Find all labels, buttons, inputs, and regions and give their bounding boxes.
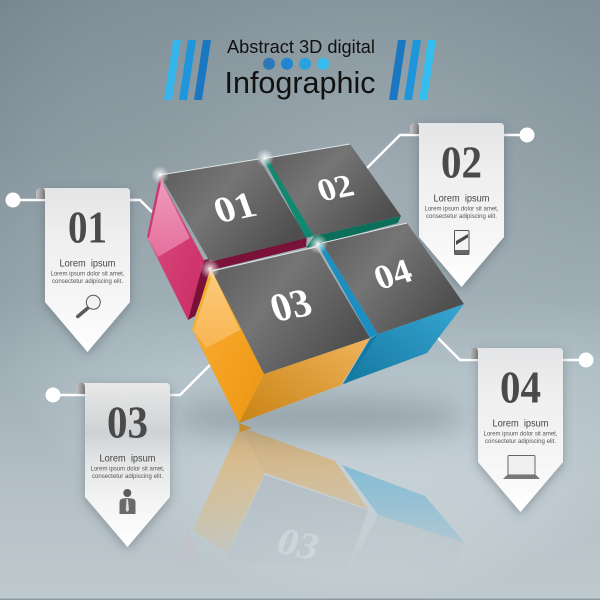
panel: 03 ribbon <box>76 383 170 547</box>
label 04: 04 <box>368 251 417 297</box>
heading 03: Lorem ipsum <box>100 452 156 464</box>
block 03 orange <box>192 247 370 432</box>
body text 02: Lorem ipsum dolor sit amet, <box>424 206 499 212</box>
face 03 <box>212 247 370 374</box>
body text 03: Lorem ipsum dolor sit amet, <box>90 466 165 472</box>
title line 1: Abstract 3D digital <box>227 37 375 57</box>
heading 02: Lorem ipsum <box>434 192 490 204</box>
connector lines <box>6 128 594 402</box>
number 01: 01 <box>68 202 107 252</box>
cube shadow on floor <box>170 398 470 438</box>
face 02 <box>267 144 401 236</box>
body text 02 <box>424 206 499 220</box>
icon: magnifier <box>78 295 100 316</box>
heading 01: Lorem ipsum <box>60 258 116 270</box>
number 02: 02 <box>441 138 482 188</box>
icon: laptop <box>503 456 540 479</box>
block 01 pink <box>147 159 307 320</box>
body text 04: Lorem ipsum dolor sit amet, <box>484 430 558 438</box>
face 04 <box>322 223 464 334</box>
body text 01: consectetur adipiscing elit. <box>52 278 123 285</box>
cube chart <box>147 144 464 432</box>
sparkles <box>151 149 328 279</box>
label 03: 03 <box>265 281 318 331</box>
number 04: 04 <box>500 362 541 412</box>
left stripes <box>164 40 211 100</box>
label 02: 02 <box>312 168 359 209</box>
connector 03 <box>53 365 210 395</box>
face 01 <box>160 159 307 262</box>
body text 03: consectetur adipiscing elit. <box>92 473 163 480</box>
body text 03 <box>90 466 165 480</box>
panel: 01 ribbon <box>36 188 130 352</box>
body text 02: consectetur adipiscing elit. <box>426 213 497 220</box>
reflected number: 03 <box>271 521 325 568</box>
reflection of cube <box>193 427 464 553</box>
panel: 02 ribbon <box>410 123 504 287</box>
title dots <box>263 58 329 70</box>
heading 04: Lorem ipsum <box>492 418 549 430</box>
icon: phone <box>454 230 469 254</box>
number 03: 03 <box>107 398 148 448</box>
right stripes <box>389 40 436 100</box>
title line 2: Infographic <box>224 65 376 100</box>
block 04 blue <box>318 223 464 384</box>
body text 01: Lorem ipsum dolor sit amet, <box>50 270 125 278</box>
icon: businessman <box>120 489 136 514</box>
connector 01 <box>13 200 152 212</box>
body text 04: consectetur adipiscing elit. <box>485 438 556 445</box>
body text 01 <box>50 270 125 285</box>
body text 04 <box>484 430 558 445</box>
label 01: 01 <box>208 185 262 231</box>
title <box>164 37 436 100</box>
block 02 green <box>264 144 401 248</box>
connector 02 <box>367 135 527 168</box>
panel: 04 ribbon <box>469 348 563 512</box>
connector 04 <box>438 338 586 360</box>
